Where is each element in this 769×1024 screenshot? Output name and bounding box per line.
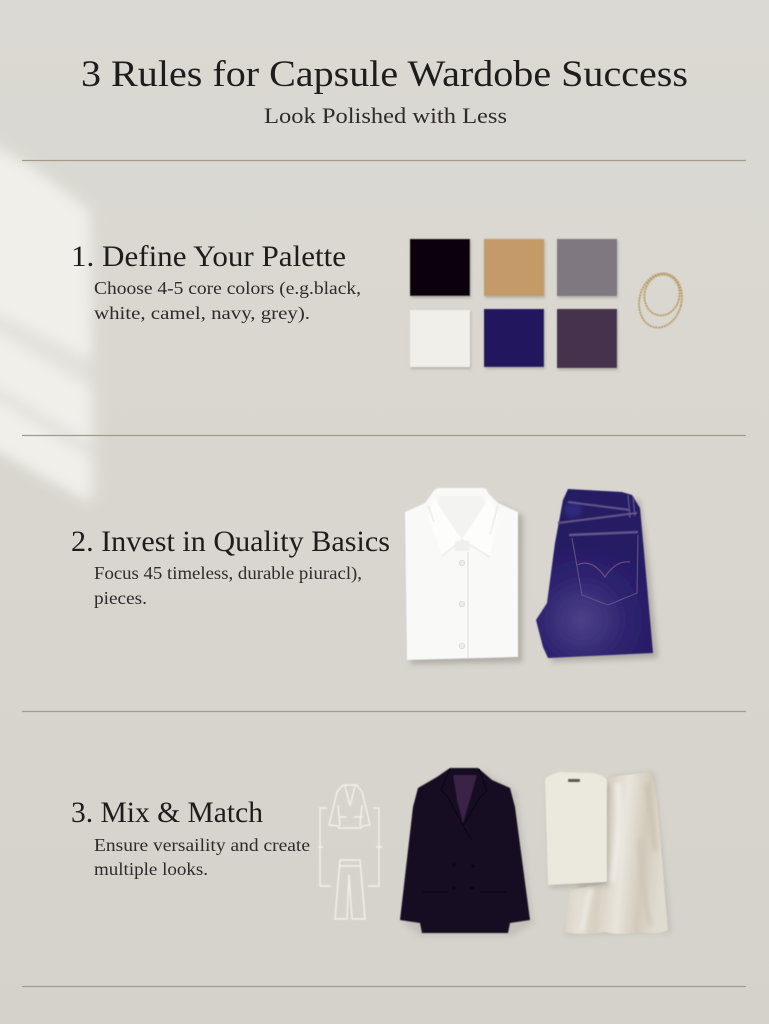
illustration: satin skirt (565, 772, 671, 935)
left bracket (318, 808, 331, 886)
body: rule 3: Ensure versaility and create (94, 835, 310, 855)
body: rule 2: pieces. (94, 588, 147, 608)
neck label (568, 779, 580, 782)
right bracket (368, 808, 382, 886)
swatch: camel (484, 239, 544, 296)
buttons (459, 560, 465, 649)
waistband (558, 495, 638, 535)
panel: rule 1 text (71, 241, 361, 324)
swatch: white (410, 310, 470, 367)
highlight fade (564, 502, 582, 518)
placket (467, 552, 469, 658)
body: rule 3: multiple looks. (94, 859, 208, 879)
buttons (452, 863, 475, 890)
illustration: dark blazer (400, 768, 533, 936)
body: rule 1: Choose 4-5 core colors (e.g.black, (94, 278, 361, 299)
heading: rule 1: 1. Define Your Palette (71, 241, 346, 273)
swatch: plum (557, 309, 617, 368)
satin folds (582, 785, 655, 930)
body: rule 2: Focus 45 timeless, durable piuracl), (94, 563, 362, 584)
icon: outfit line drawing (318, 785, 382, 919)
pockets (423, 891, 506, 893)
blazer outline (329, 785, 370, 828)
panel: rule 2 text (71, 526, 390, 608)
icon: gold necklace (633, 269, 688, 332)
illustration: cream tee (545, 772, 609, 888)
pocket stitching (577, 562, 630, 577)
lapels (441, 769, 487, 840)
heading: rule 3: 3. Mix & Match (71, 797, 263, 829)
divider lines (22, 160, 746, 986)
body: rule 1 (94, 278, 361, 324)
panel: rule 3 text (71, 797, 310, 879)
body: rule 3 (94, 835, 310, 879)
lining (453, 775, 477, 823)
subtitle: Look Polished with Less (264, 103, 507, 128)
swatch: navy (484, 309, 544, 367)
window light (0, 135, 95, 502)
body: rule 1: white, camel, navy, grey). (94, 303, 310, 324)
trousers outline (335, 860, 365, 919)
title: 3 Rules for Capsule Wardobe Success (81, 54, 688, 95)
body: rule 2 (94, 563, 362, 608)
swatch: grey (557, 239, 617, 296)
shadows (411, 240, 618, 370)
heading: rule 2: 2. Invest in Quality Basics (71, 526, 390, 558)
swatch: black (410, 239, 470, 296)
illustration: white folded shirt (405, 488, 523, 664)
back pocket (572, 535, 638, 605)
collar (428, 496, 498, 557)
panel: colour swatches (410, 239, 618, 370)
illustration: folded jeans (536, 489, 658, 662)
